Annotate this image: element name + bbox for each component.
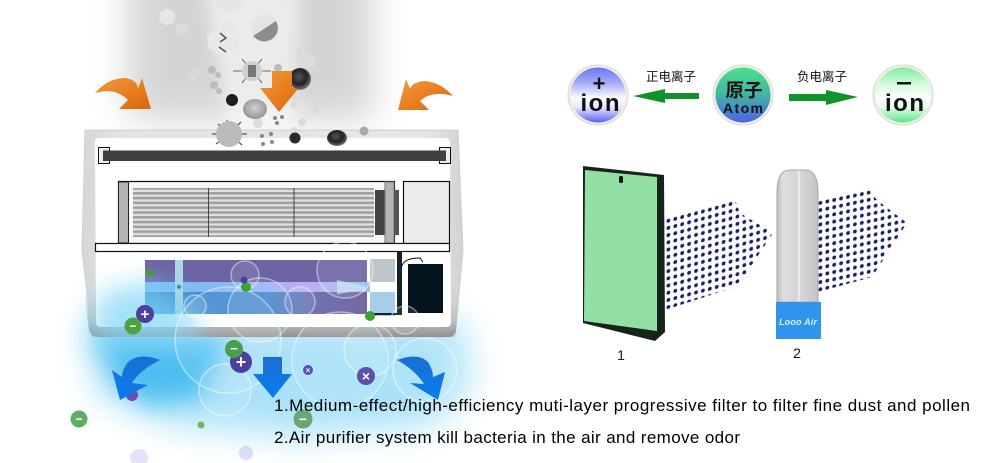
virus [212,120,247,147]
dot stream 1 [665,200,773,310]
ions: − [75,412,83,426]
blue glow over unit [90,280,205,350]
feature text 1: 1.Medium-effect/high-efficiency muti-layer progressive filter to filter fine dust and pollen [274,396,970,415]
shell bottom [84,290,460,337]
UV filter panel [145,259,395,316]
orange arrow center [260,71,298,112]
ions: − [129,319,137,333]
gray sphere [243,99,267,119]
fan coil panel [118,182,399,244]
tube base [776,302,821,339]
orange arrow left [95,78,151,109]
ion diagram [568,65,933,125]
label negative ion: 负电离子 [797,69,847,84]
ion tube [776,170,821,339]
dust particles [159,0,368,147]
unit shell [82,130,463,337]
top hexagon [216,0,244,13]
atom: Atom [723,100,763,116]
positive ion: + [593,71,605,96]
blue arrow center [253,357,292,398]
atom: 原子 [725,80,763,101]
ions: + [141,306,150,323]
bubbles [175,242,457,416]
smoke background [128,0,373,130]
ions: × [362,368,370,384]
ions: − [230,341,238,356]
negative ion: ion [885,90,924,117]
shelf [96,244,450,252]
positive ion: ion [580,90,620,117]
pie particle [251,14,279,42]
ions: × [306,366,311,375]
number 2: 2 [793,345,801,361]
top vent bar [98,148,450,164]
negative ion [873,65,933,125]
orange arrow right [398,79,453,110]
dark sphere [289,68,311,90]
hexagon particle [207,27,240,56]
positive ion [568,65,628,125]
ion tube: Looo Air [779,317,817,327]
label positive ion: 正电离子 [646,69,696,84]
blue arrow right [397,356,445,400]
right box [404,182,450,244]
dot stream 2 [817,189,907,292]
power supply [372,252,443,315]
blue air glow [85,320,470,435]
ions: + [236,352,246,372]
number 1: 1 [617,347,625,363]
atom [713,65,773,125]
inner white body [95,138,451,327]
filter panel [583,166,665,341]
arrow to positive ion [633,89,699,103]
small ion behind arrow [126,389,138,401]
blue arrow left [112,356,160,400]
spiked particle [233,59,271,83]
ions [70,270,375,463]
air purifier unit [82,130,463,337]
feature text 2: 2.Air purifier system kill bacteria in the air and remove odor [274,428,740,447]
arrow to negative ion [789,90,858,105]
ions: − [299,411,307,427]
